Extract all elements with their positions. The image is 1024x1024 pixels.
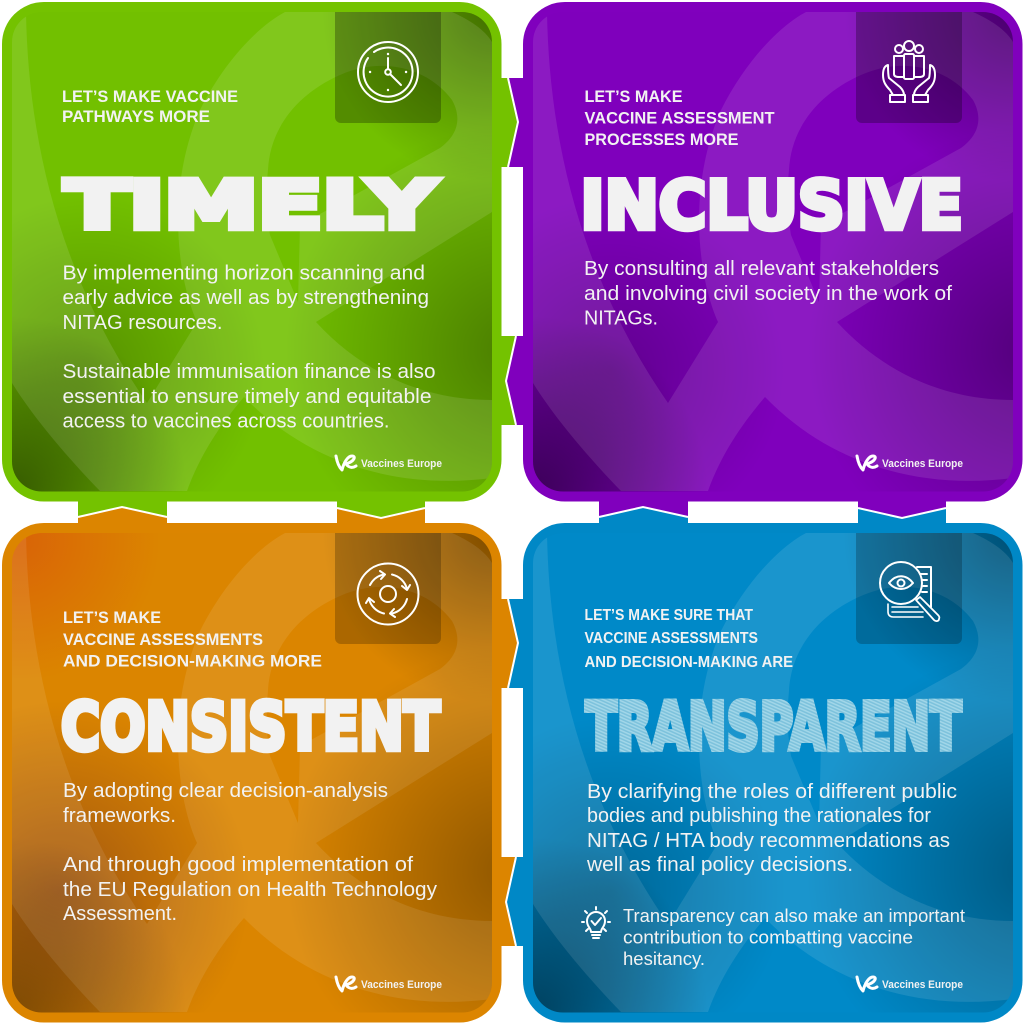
callout text (623, 906, 965, 969)
logo: Vaccines Europe: Vaccines Europe (361, 979, 442, 991)
panel: timely (2, 2, 502, 502)
body text (584, 258, 952, 330)
callout text: Transparency can also make an important (623, 906, 965, 926)
kicker: AND DECISION-MAKING ARE (584, 654, 793, 671)
connector: timely to consistent, right (337, 500, 425, 524)
body text: and involving civil society in the work of (584, 283, 952, 305)
icon box (335, 533, 441, 644)
logo: Vaccines Europe (857, 456, 963, 470)
body text (62, 262, 436, 432)
body text: By adopting clear decision-analysis (63, 780, 388, 802)
kicker: LET’S MAKE VACCINE (62, 88, 238, 106)
icon: cycle arrows (358, 564, 418, 624)
callout text: hesitancy. (623, 949, 705, 969)
panel background: orange with watermark (2, 523, 502, 1022)
body text: By implementing horizon scanning and (62, 262, 425, 284)
kicker: VACCINE ASSESSMENTS (584, 630, 758, 647)
kicker (584, 88, 774, 149)
body text: access to vaccines across countries. (62, 410, 390, 432)
body text: essential to ensure timely and equitable (62, 386, 432, 408)
body text (63, 780, 437, 925)
icon: clock (358, 42, 418, 102)
icon: light bulb with check (582, 907, 610, 938)
connector: consistent to transparent, upper (500, 599, 524, 688)
panel: consistent (2, 523, 502, 1022)
kicker: AND DECISION-MAKING MORE (63, 652, 322, 670)
logo: Vaccines Europe (857, 977, 963, 991)
body text (586, 781, 957, 876)
icon box (335, 12, 441, 123)
body text: By clarifying the roles of different public (587, 781, 957, 803)
kicker: LET’S MAKE SURE THAT (584, 607, 753, 624)
kicker: VACCINE ASSESSMENTS (63, 631, 263, 649)
body text: early advice as well as by strengthening (62, 287, 429, 309)
kicker (63, 609, 322, 670)
heading: INCLUSIVE: INCLUSIVE (580, 166, 963, 244)
callout text: contribution to combatting vaccine (623, 928, 913, 948)
body text: well as final policy decisions. (586, 854, 853, 876)
icon: magnifier over document (880, 562, 939, 621)
logo: Vaccines Europe: Vaccines Europe (361, 458, 442, 470)
logo: Vaccines Europe: Vaccines Europe (882, 979, 963, 991)
body text: NITAG resources. (62, 312, 222, 334)
body text: And through good implementation of (63, 854, 413, 876)
connector: timely to consistent, left (78, 500, 167, 524)
logo: Vaccines Europe (336, 977, 442, 991)
body text: By consulting all relevant stakeholders (584, 258, 939, 280)
icon: hands holding people (883, 41, 935, 102)
connector: consistent to transparent, lower (500, 857, 524, 946)
body text: the EU Regulation on Health Technology (63, 879, 437, 901)
panel background: green with watermark (2, 2, 502, 502)
kicker (62, 88, 238, 126)
kicker: VACCINE ASSESSMENT (584, 110, 774, 128)
kicker: LET’S MAKE (584, 88, 682, 106)
body text: bodies and publishing the rationales for (587, 805, 931, 827)
kicker: LET’S MAKE (63, 609, 161, 627)
body text: frameworks. (63, 805, 176, 827)
kicker: PATHWAYS MORE (62, 108, 210, 126)
kicker (584, 607, 793, 671)
panel background: blue with watermark (523, 523, 1022, 1022)
connector: inclusive to transparent, right (858, 500, 946, 524)
connector: inclusive to transparent, left (599, 500, 688, 524)
body text: NITAG / HTA body recommendations as (587, 830, 950, 852)
body text: NITAGs. (584, 308, 658, 330)
icon box (856, 533, 962, 644)
body text: Assessment. (63, 903, 177, 925)
connector: timely to inclusive, upper (500, 78, 524, 167)
panel: inclusive (523, 2, 1022, 502)
logo: Vaccines Europe (336, 456, 442, 470)
heading: TIMELY: TIMELY (65, 167, 438, 244)
panel: transparent (523, 523, 1022, 1022)
kicker: PROCESSES MORE (584, 131, 738, 149)
logo: Vaccines Europe: Vaccines Europe (882, 458, 963, 470)
panel background: purple with watermark (523, 2, 1022, 502)
connector: timely to inclusive, lower (500, 336, 524, 425)
heading: CONSISTENT: CONSISTENT (61, 688, 440, 766)
icon box (856, 12, 962, 123)
body text: Sustainable immunisation finance is also (62, 361, 436, 383)
